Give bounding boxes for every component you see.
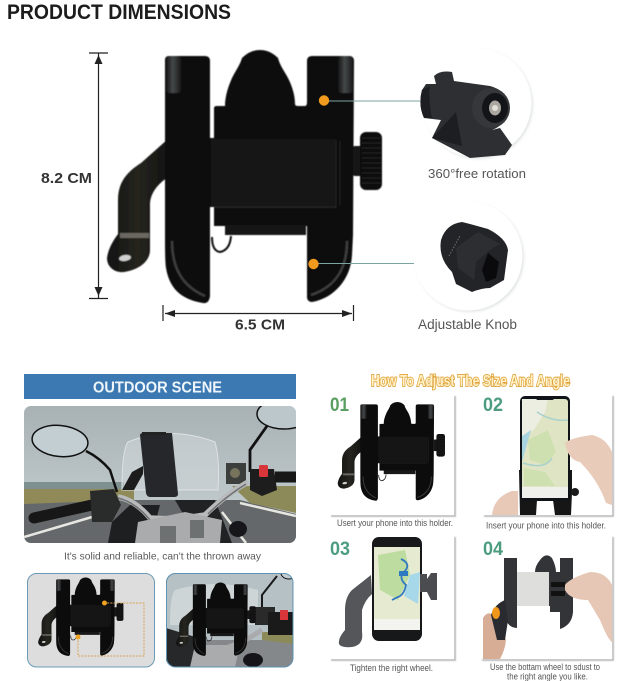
callout: knob pointer	[308, 259, 414, 269]
height label: 8.2 CM	[41, 170, 92, 187]
step 03 panel	[330, 536, 455, 660]
product photo: phone holder	[107, 50, 382, 303]
heading: how to adjust: How To Adjust The Size And Angle	[371, 373, 570, 390]
caption: step 03: Tighten the right wheel.	[350, 663, 433, 673]
icon: phone with route map	[372, 537, 422, 641]
icon: right hand	[565, 435, 612, 505]
step number 03: 03	[330, 538, 350, 560]
step 04 panel	[482, 536, 613, 660]
detail circle: adjustable knob	[414, 202, 524, 312]
step number 04: 04	[483, 538, 503, 560]
caption: step 02: Insert your phone into this holder.	[486, 520, 606, 530]
icon: right hand	[565, 572, 612, 642]
icon: left hand	[492, 491, 518, 515]
icon: holder thumbnail	[38, 578, 123, 656]
icon: adjustment guide dashes	[76, 600, 144, 656]
caption: step 01: Usert your phone into this holder.	[337, 518, 453, 528]
panel: holder dimensions thumbnail	[28, 574, 154, 667]
width dimension arrow	[163, 305, 354, 321]
icon: left hand with arm	[483, 600, 508, 659]
panel: holder on motorcycle thumbnail	[166, 567, 297, 667]
detail circle: rotation joint	[420, 48, 532, 158]
panel: outdoor scene banner	[24, 374, 296, 399]
step 02 panel	[483, 394, 613, 516]
photo: motorcycle with phone mount	[24, 399, 311, 543]
icon: holder with plate	[504, 555, 573, 629]
step 01 panel	[330, 394, 455, 516]
icon: phone with map in holder	[519, 396, 579, 515]
label: adjustable knob: Adjustable Knob	[418, 317, 517, 332]
title: product dimensions: PRODUCT DIMENSIONS	[7, 0, 231, 24]
height dimension arrow	[89, 53, 108, 298]
caption: step 04	[490, 662, 600, 681]
icon: tightening wheel	[420, 573, 437, 600]
step number 01: 01	[330, 394, 349, 416]
caption: step 04: Use the bottam wheel to sdust to	[490, 662, 600, 672]
icon: mount arm	[339, 575, 372, 647]
callout: rotation pointer	[319, 95, 420, 106]
label: 360 free rotation: 360°free rotation	[428, 166, 526, 181]
step number 02: 02	[483, 394, 503, 416]
caption: outdoor scene: It's solid and reliable, can't the thrown away	[64, 550, 262, 562]
width label: 6.5 CM	[235, 316, 285, 334]
panel: outdoor scene banner: OUTDOOR SCENE	[93, 380, 222, 396]
icon: holder step 1	[338, 402, 445, 501]
